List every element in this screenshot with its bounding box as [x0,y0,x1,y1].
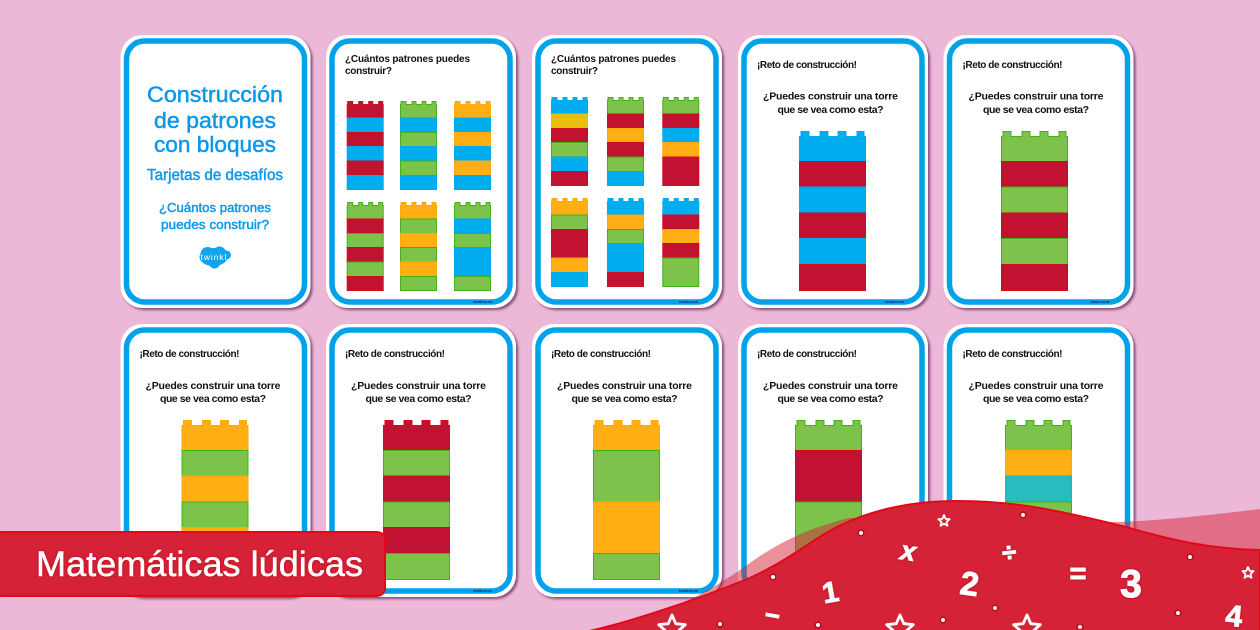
tower 5 [400,202,436,290]
card question [146,380,281,405]
card: patterns set one [326,35,516,308]
tower [384,420,450,580]
tower 6 [454,202,490,290]
tower 2 [400,102,436,190]
footer credit: twinkl.co.uk [679,589,698,593]
icon: twinkl logo: twinkl [200,252,227,262]
icon: twinkl logo [200,246,231,268]
translucent back wave [640,509,1260,630]
cover question [159,200,271,232]
tower [594,420,660,580]
card: challenge green and red [944,35,1134,308]
card heading [551,54,676,77]
card: challenge orange and green [120,324,310,597]
card question: ¿Puedes construir una torre [557,380,692,392]
card heading: ¡Reto de construcción! [140,349,240,360]
card heading: ¡Reto de construcción! [962,60,1062,71]
tower 1 [552,98,588,186]
card question: que se vea como esta? [983,104,1089,116]
card heading: ¡Reto de construcción! [345,349,445,360]
cover title [147,82,283,157]
card: challenge orange and wide green [532,324,722,597]
card question: que se vea como esta? [778,393,884,405]
card: challenge green orange teal [944,324,1134,597]
card question [968,380,1104,405]
banner: Matemáticas lúdicas: Matemáticas lúdicas [36,545,363,584]
card question: que se vea como esta? [160,393,266,405]
card heading: construir? [551,66,598,77]
card heading: ¿Cuántos patrones puedes [551,54,676,65]
cover subtitle: Tarjetas de desafíos [147,167,283,184]
card: challenge red and green [326,324,516,597]
cover title: con bloques [154,132,276,157]
cover question: puedes construir? [161,217,269,232]
banner: Matemáticas lúdicas [0,532,385,596]
card: challenge blue and red [738,35,928,308]
card heading: ¡Reto de construcción! [551,349,651,360]
footer credit: twinkl.co.uk [1090,300,1110,304]
tower 1 [347,102,383,190]
tower 6 [663,198,699,286]
card question [763,380,898,405]
symbol: times: x [897,535,919,567]
red wave with maths symbols [589,501,1260,630]
small stars [938,515,1254,578]
cover question: ¿Cuántos patrones [159,200,271,215]
card question [968,90,1104,116]
card heading: ¡Reto de construcción! [757,60,857,71]
footer credit: twinkl.co.uk [473,589,492,593]
tower [182,420,248,580]
card heading [345,54,470,77]
symbol: 1: 1 [820,576,841,610]
card question [763,90,898,116]
card heading: ¡Reto de construcción! [962,349,1062,360]
card question: que se vea como esta? [778,104,884,116]
card heading: ¡Reto de construcción! [757,349,857,360]
large stars [659,615,1040,630]
tower 3 [663,98,699,186]
tower 4 [347,202,383,290]
symbol: 2: 2 [958,564,981,603]
card question: que se vea como esta? [983,393,1089,405]
cover title: Construcción [147,82,283,107]
footer credit: twinkl.co.uk [679,300,698,304]
card question [557,380,692,405]
card heading: construir? [345,66,392,77]
tower [796,420,862,580]
cover title: de patrones [154,108,276,133]
symbol: equals: = [1070,558,1086,590]
card heading: ¿Cuántos patrones puedes [345,54,470,65]
card question: que se vea como esta? [572,393,678,405]
tower 2 [608,98,644,186]
tower [1002,132,1068,290]
dots [717,512,1193,630]
card question: ¿Puedes construir una torre [763,380,898,392]
symbol: divide: ÷ [1000,536,1018,568]
tower 3 [454,102,490,190]
symbol: 3: 3 [1120,563,1142,606]
card: challenge green and wide red [738,324,928,597]
footer credit: twinkl.co.uk [885,300,904,304]
tower 4 [552,198,588,286]
tower [1006,420,1072,580]
footer credit: twinkl.co.uk [473,300,492,304]
card: patterns set two [532,35,722,308]
card question: ¿Puedes construir una torre [968,90,1104,102]
card question: que se vea como esta? [366,393,472,405]
card question [351,380,486,405]
tower 5 [608,198,644,286]
card question: ¿Puedes construir una torre [146,380,281,392]
card: cover [120,35,310,308]
card question: ¿Puedes construir una torre [968,380,1104,392]
card question: ¿Puedes construir una torre [763,90,898,102]
card question: ¿Puedes construir una torre [351,380,486,392]
tower [800,132,866,290]
